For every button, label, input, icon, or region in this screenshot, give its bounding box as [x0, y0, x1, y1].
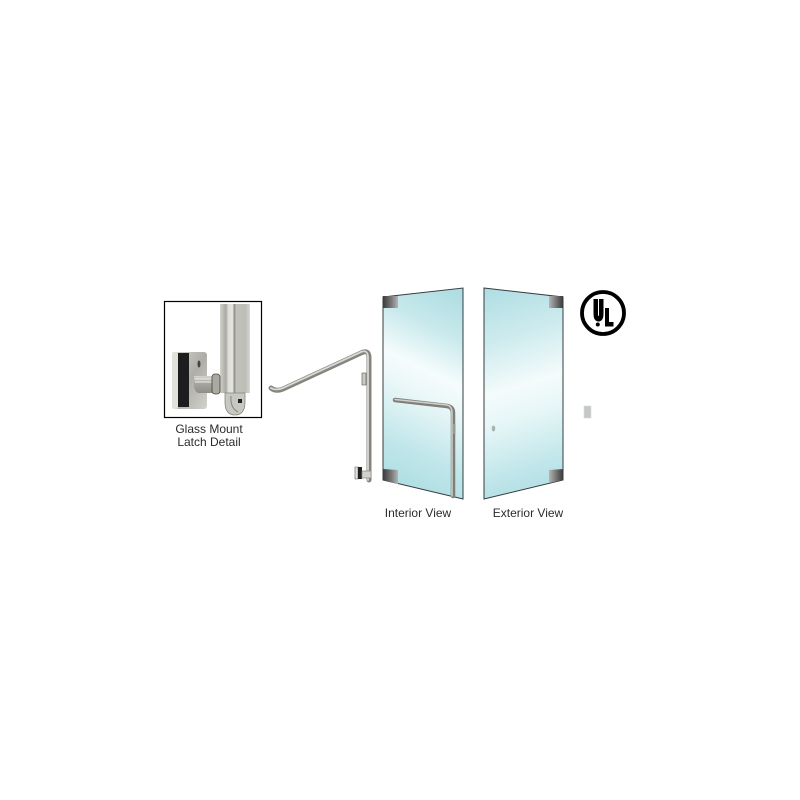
icon: exterior knob [492, 426, 495, 432]
panel: exterior door [484, 288, 563, 499]
icon: bottom patch fitting [549, 469, 563, 483]
icon: UL certification mark [582, 292, 624, 334]
icon: pivot foot [225, 393, 245, 415]
heading: latch detail caption: Glass Mount [175, 422, 243, 436]
icon: glass mount bracket [172, 352, 207, 409]
icon: connector barrel [194, 374, 220, 394]
label: interior view: Interior View [385, 506, 452, 520]
icon: bottom patch fitting [383, 469, 398, 484]
icon: latch pull pole [220, 304, 250, 393]
panel: interior door [383, 288, 463, 499]
heading: latch detail caption: Latch Detail [177, 435, 241, 449]
icon: standalone pull handle [271, 351, 371, 480]
panel: glass mount latch detail [164, 302, 262, 418]
label: exterior view: Exterior View [493, 506, 564, 520]
icon: top patch fitting [383, 296, 398, 308]
icon: door pull handle [395, 400, 456, 496]
icon: top patch fitting [549, 296, 563, 308]
icon: small strike plate [584, 406, 591, 418]
